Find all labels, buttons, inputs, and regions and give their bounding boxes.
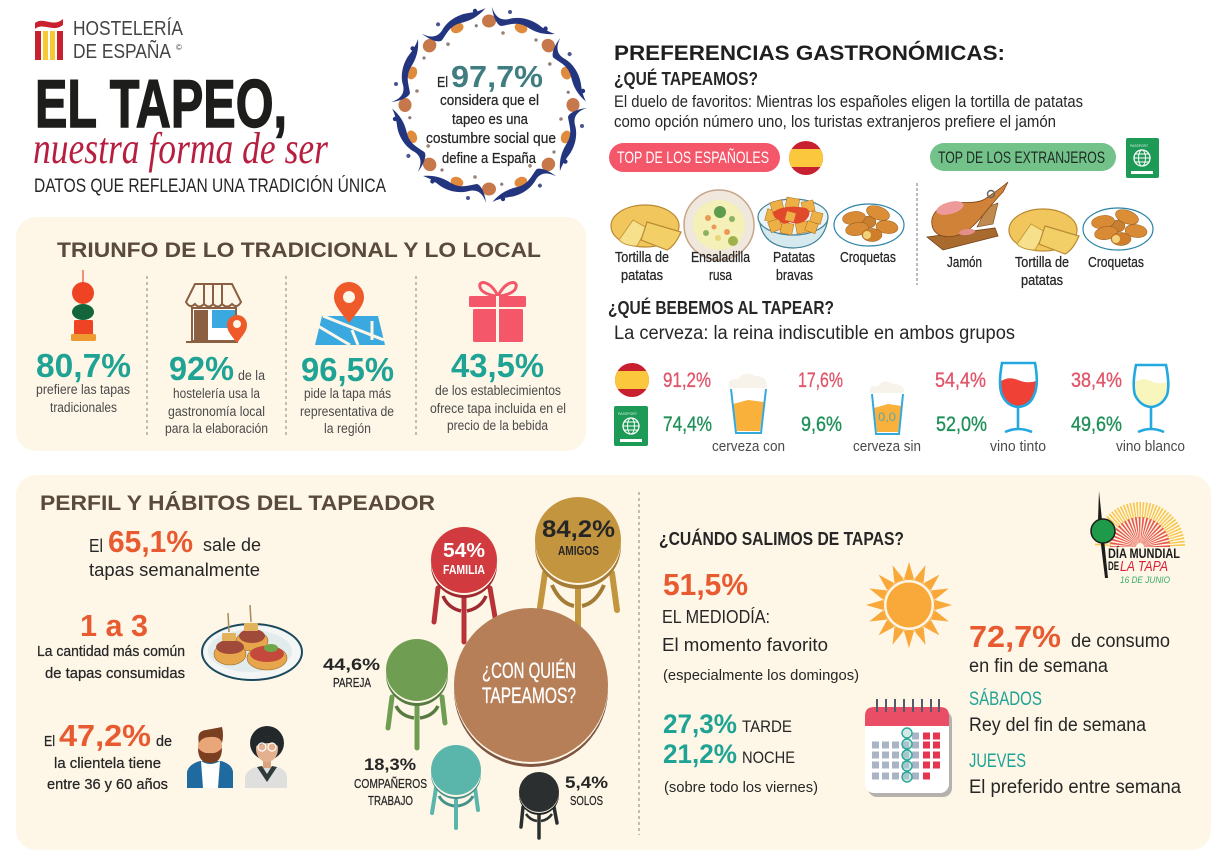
stat: 1 a 3: La cantidad más común	[37, 643, 185, 660]
stat: 92%	[165, 350, 268, 436]
stat: 80,7%: prefiere las tapas	[36, 382, 130, 397]
stat: 92%: hostelería usa la	[173, 386, 260, 401]
stat: 80,7%: tradicionales	[50, 400, 117, 415]
food: croquetas (extranjeros)	[1083, 207, 1153, 271]
pill: top de los extranjeros: TOP DE LOS EXTRANJEROS	[938, 148, 1105, 167]
drink: vino blanco: 49,6%	[1071, 413, 1122, 436]
text: sábados: Rey del fin de semana	[969, 715, 1146, 736]
icon: woman	[245, 726, 287, 788]
stat: 43,5%	[430, 347, 566, 433]
stat: 47,2%: 47,2%	[59, 718, 151, 753]
drink: cerveza con: 74,4%	[663, 413, 712, 436]
food: ensaladilla rusa: Ensaladilla	[691, 250, 751, 266]
stat: 51,5% mediodía: 51,5%	[663, 567, 748, 602]
stat: 72,7% fin de semana: 72,7%	[969, 619, 1061, 654]
stat: 96,5%	[300, 351, 394, 436]
stool: amigos: 84,2%	[542, 516, 615, 543]
stat: 65,1%	[89, 524, 261, 580]
stool: compañeros trabajo: COMPAÑEROS	[354, 776, 427, 791]
food: tortilla de patatas (extranjeros)	[1009, 209, 1079, 289]
stool: familia	[431, 527, 497, 642]
stat: 96,5%: 96,5%	[301, 351, 394, 388]
badge: 97,7% ring: 97,7%	[451, 59, 543, 94]
food: tortilla de patatas (extranjeros): patatas	[1021, 273, 1063, 289]
panel heading: PERFIL Y HÁBITOS DEL TAPEADOR	[40, 492, 435, 515]
stat: 43,5%: precio de la bebida	[447, 418, 548, 433]
stat: 92%: para la elaboración	[165, 421, 268, 436]
stat: 47,2%: de	[156, 733, 172, 750]
stat: 96,5%: representativa de	[300, 404, 394, 419]
stat: tarde y noche: 21,2%	[663, 739, 737, 769]
stat: 43,5%: de los establecimientos	[435, 383, 561, 398]
drink: cerveza con	[663, 369, 785, 455]
badge: 97,7% ring: El	[437, 74, 448, 91]
stat: 72,7% fin de semana: de consumo	[1071, 631, 1170, 652]
stat: 65,1%: tapas semanalmente	[89, 560, 260, 580]
icon: passport drinks: PASSPORT	[618, 411, 637, 416]
drink: cerveza sin: 0,0	[878, 410, 896, 424]
intro text	[614, 92, 1083, 131]
drink: vino tinto: 54,4%	[935, 369, 986, 392]
icon: map pin	[315, 282, 385, 345]
drink: cerveza sin: 17,6%	[798, 369, 843, 392]
drink: vino tinto	[935, 363, 1046, 455]
stool: pareja: PAREJA	[333, 675, 371, 690]
food: croquetas (extranjeros): Croquetas	[1088, 255, 1144, 271]
stat: 92%: de la	[238, 368, 265, 383]
stat: 96,5%: pide la tapa más	[304, 386, 391, 401]
text: jueves	[969, 751, 1181, 798]
stat: 51,5% mediodía	[662, 567, 859, 684]
stat: 65,1%: 65,1%	[108, 524, 193, 559]
food: tortilla de patatas: patatas	[621, 268, 663, 284]
stat: 80,7%	[36, 347, 131, 415]
stat: tarde y noche: NOCHE	[742, 748, 795, 767]
logo: Hostelería de España	[35, 17, 184, 63]
stool: pareja: 44,6%	[323, 655, 380, 674]
panel: perfil y hábitos del tapeador	[16, 475, 1211, 850]
heading: qué tapeamos: ¿QUÉ TAPEAMOS?	[614, 68, 758, 89]
stat: tarde y noche	[663, 709, 818, 796]
logo: día mundial de la tapa: 16 DE JUNIO	[1120, 575, 1170, 585]
stat: 1 a 3: de tapas consumidas	[45, 665, 185, 682]
badge: 97,7% ring: define a España	[442, 150, 537, 167]
stool: compañeros trabajo: 18,3%	[364, 755, 416, 774]
stat: 1 a 3: 1 a 3	[80, 608, 148, 643]
stat: 65,1%: sale de	[203, 535, 261, 555]
stool: compañeros trabajo: TRABAJO	[368, 793, 413, 808]
pill: top de los extranjeros	[930, 143, 1116, 171]
intro text: como opción número uno, los turistas extranjeros prefiere el jamón	[614, 112, 1056, 131]
icon: passport drinks	[614, 406, 648, 446]
drink: cerveza con: 91,2%	[663, 369, 711, 392]
central table: con quién tapeamos: ¿CON QUIÉN	[482, 658, 576, 683]
subtitle script: nuestra forma de ser	[33, 124, 329, 173]
drink: vino blanco: 38,4%	[1071, 369, 1122, 392]
icon: sun	[866, 562, 952, 648]
food: croquetas	[834, 203, 904, 266]
logo: día mundial de la tapa: DE	[1108, 559, 1119, 573]
heading: preferencias gastronómicas: PREFERENCIAS GASTRONÓMICAS:	[614, 41, 1005, 65]
icon: passport: PASSPORT	[1130, 143, 1148, 148]
stat: tarde y noche: TARDE	[742, 717, 792, 736]
icon: spanish flag	[789, 141, 823, 175]
stool: solos: 5,4%	[565, 773, 608, 792]
text: jueves: JUEVES	[969, 751, 1026, 772]
drink: vino tinto: 52,0%	[936, 413, 987, 436]
stat: 1 a 3	[37, 608, 185, 682]
stool: pareja	[323, 639, 448, 748]
pill: top de los españoles: TOP DE LOS ESPAÑOLES	[617, 148, 769, 167]
food: ensaladilla rusa: rusa	[709, 268, 733, 284]
logo: Hostelería de España: DE ESPAÑA	[73, 39, 172, 63]
stat: tarde y noche: 27,3%	[663, 709, 737, 739]
icon: calendar	[865, 699, 952, 797]
icon: store with pin	[186, 284, 247, 343]
stat: 47,2%	[44, 718, 172, 793]
stat: 51,5% mediodía: EL MEDIODÍA:	[662, 607, 770, 627]
stool: familia: 54%	[443, 540, 485, 562]
text: sábados: SÁBADOS	[969, 689, 1042, 710]
stat: 51,5% mediodía: (especialmente los domingos)	[663, 667, 859, 684]
heading: cuándo salimos: ¿CUÁNDO SALIMOS DE TAPAS?	[659, 528, 904, 549]
stat: 72,7% fin de semana: en fin de semana	[969, 656, 1108, 677]
food: tortilla de patatas	[611, 205, 681, 284]
text: sábados	[969, 689, 1146, 736]
food: patatas bravas: Patatas	[773, 250, 815, 266]
food: ensaladilla rusa	[684, 190, 754, 284]
stool: solos	[519, 772, 608, 838]
icon: skewer	[71, 270, 96, 341]
pill: top de los españoles	[609, 143, 780, 172]
drink: vino tinto: vino tinto	[990, 438, 1046, 455]
stat: 72,7% fin de semana	[969, 619, 1170, 677]
badge: 97,7% ring: tapeo es una	[452, 111, 529, 128]
panel heading: TRIUNFO DE LO TRADICIONAL Y LO LOCAL	[57, 239, 541, 262]
logo: Hostelería de España: HOSTELERÍA	[73, 17, 184, 40]
stat: 65,1%: El	[89, 536, 103, 556]
logo: día mundial de la tapa: LA TAPA	[1120, 558, 1168, 575]
divider: comparison	[916, 183, 918, 285]
central table: con quién tapeamos	[454, 608, 608, 767]
icon: passport	[1126, 138, 1159, 178]
stat: tarde y noche: (sobre todo los viernes)	[664, 779, 818, 796]
stat: 47,2%: entre 36 y 60 años	[47, 776, 168, 793]
food: jamón: Jamón	[947, 255, 982, 271]
intro text: El duelo de favoritos: Mientras los españoles eligen la tortilla de patatas	[614, 92, 1083, 111]
stool: solos: SOLOS	[570, 793, 603, 808]
stat: 47,2%: la clientela tiene	[54, 755, 161, 772]
stool: familia: FAMILIA	[443, 562, 485, 577]
food: tortilla de patatas (extranjeros): Tortilla de	[1015, 255, 1069, 271]
drink: vino blanco	[1071, 365, 1185, 455]
drink: vino blanco: vino blanco	[1116, 438, 1185, 455]
panel: triunfo de lo tradicional y lo local	[16, 217, 586, 451]
stat: 47,2%: El	[44, 733, 55, 750]
dividers	[147, 276, 416, 437]
logo: día mundial de la tapa	[1091, 491, 1180, 585]
drink: cerveza sin: cerveza sin	[853, 438, 921, 455]
stool: amigos	[535, 497, 621, 625]
heading: qué bebemos: ¿QUÉ BEBEMOS AL TAPEAR?	[608, 297, 834, 318]
stat: 43,5%: 43,5%	[451, 347, 544, 384]
food: croquetas: Croquetas	[840, 250, 896, 266]
badge: 97,7% ring	[373, 0, 605, 221]
icon: man	[187, 727, 233, 788]
stat: 92%: 92%	[169, 350, 234, 387]
stat: 80,7%: 80,7%	[36, 347, 131, 384]
stat: 92%: gastronomía local	[168, 404, 265, 419]
icon: spanish flag drinks	[615, 363, 649, 397]
stool: amigos: AMIGOS	[558, 543, 599, 558]
badge: 97,7% ring: considera que el	[440, 92, 539, 109]
food: tortilla de patatas: Tortilla de	[615, 250, 669, 266]
central table: con quién tapeamos: TAPEAMOS?	[482, 683, 576, 708]
stool: compañeros trabajo	[354, 745, 481, 828]
food: jamón	[927, 182, 1008, 271]
food: patatas bravas: bravas	[776, 268, 813, 284]
icon: plate of tapas	[202, 605, 302, 680]
stat: 51,5% mediodía: El momento favorito	[662, 635, 828, 655]
food: patatas bravas	[758, 197, 828, 284]
badge: 97,7% ring: costumbre social que	[426, 130, 556, 147]
drink: cerveza sin: 9,6%	[801, 413, 842, 436]
stat: 43,5%: ofrece tapa incluida en el	[430, 401, 566, 416]
title: EL TAPEO,	[35, 66, 287, 142]
logo: día mundial de la tapa: DÍA MUNDIAL	[1108, 545, 1180, 561]
divider	[638, 492, 640, 835]
logo: Hostelería de España: ©	[176, 43, 182, 52]
stat: 96,5%: la región	[324, 421, 371, 436]
drink: cerveza con: cerveza con	[712, 438, 785, 455]
drink: cerveza sin	[798, 369, 921, 455]
text: jueves: El preferido entre semana	[969, 777, 1181, 798]
tagline: DATOS QUE REFLEJAN UNA TRADICIÓN ÚNICA	[34, 175, 386, 197]
icon: gift	[469, 283, 526, 342]
text: la cerveza: La cerveza: la reina indiscutible en ambos grupos	[614, 323, 1015, 344]
